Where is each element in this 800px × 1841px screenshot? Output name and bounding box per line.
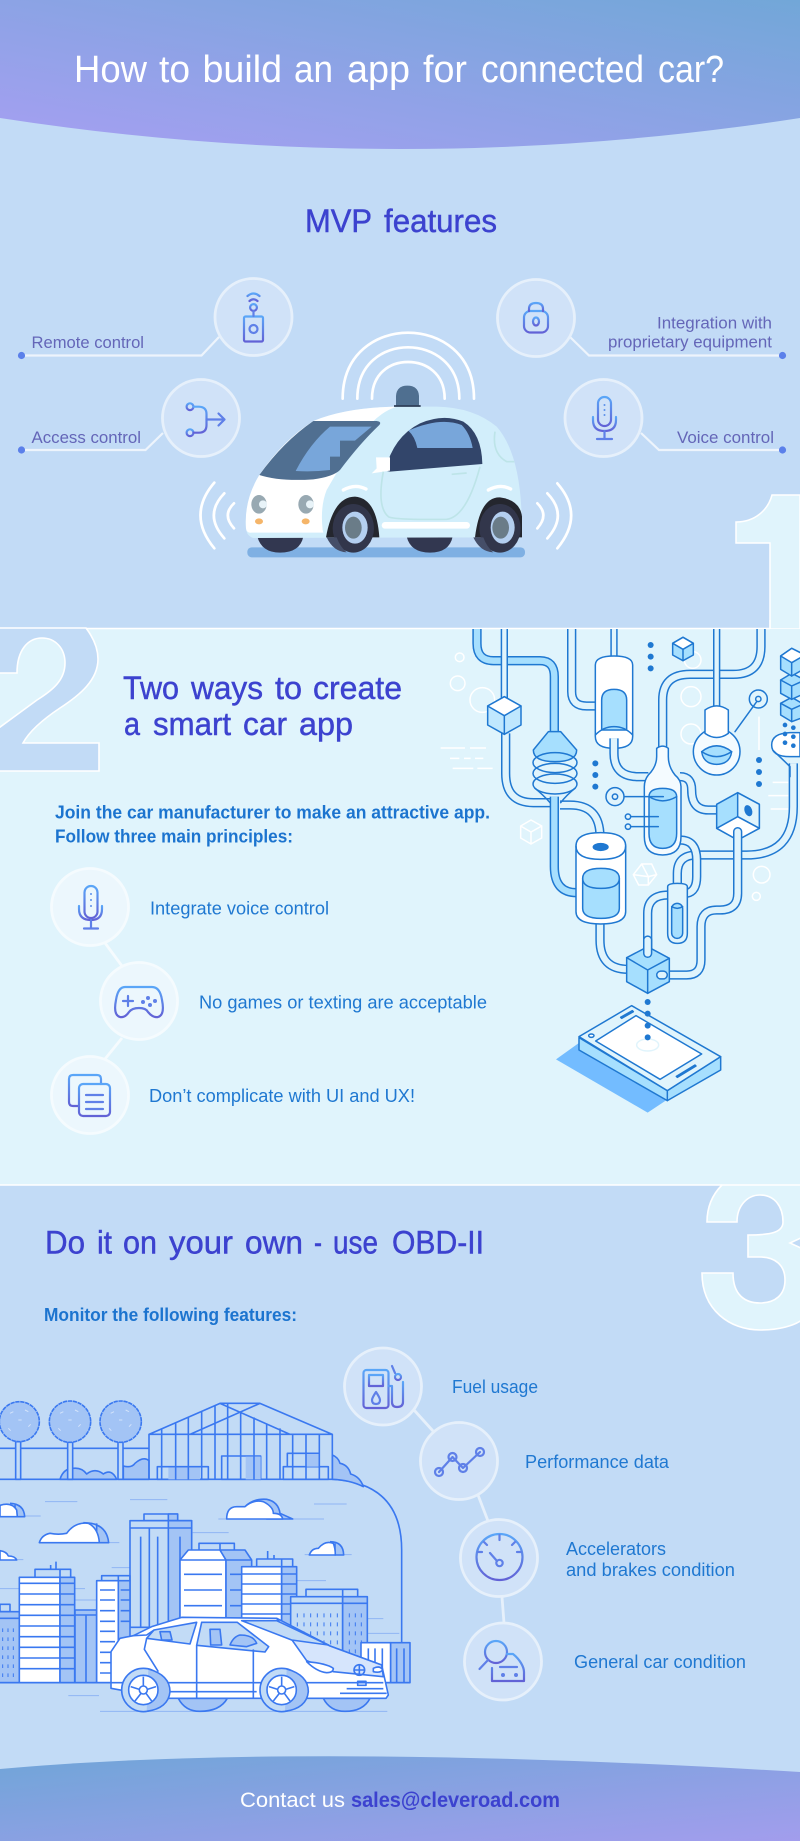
principle: simple UI <box>52 1056 415 1134</box>
heading: OBD-II: your <box>169 1224 233 1260</box>
container block <box>361 1643 410 1683</box>
wide right block <box>291 1589 367 1660</box>
heading: MVP features: MVP <box>305 203 372 239</box>
windshield <box>259 421 380 480</box>
phone <box>579 1006 721 1101</box>
footer contact <box>240 1789 560 1812</box>
title: build <box>202 49 282 91</box>
dots over phone <box>645 999 651 1040</box>
angled tower <box>180 1543 252 1630</box>
dots <box>592 642 796 790</box>
title: app <box>347 49 410 91</box>
funnel coils <box>533 732 577 803</box>
heading: MVP features: features <box>384 203 497 239</box>
section 2 panel <box>0 629 800 1185</box>
signal arcs <box>200 333 571 548</box>
heading: two ways: smart <box>153 706 231 742</box>
beacon <box>396 386 419 406</box>
panel edges <box>0 628 770 1185</box>
illustration: pipes and phone <box>441 627 800 1113</box>
feature: voice control <box>565 380 786 456</box>
tube: cube down <box>661 832 738 975</box>
wheels under car <box>257 537 303 553</box>
icon: lock <box>524 303 548 332</box>
footer contact: Contact us <box>240 1789 345 1812</box>
title: an <box>294 49 333 91</box>
tube: narrow syringe top <box>610 629 618 656</box>
test tube <box>668 883 687 943</box>
principle: no games <box>100 962 487 1040</box>
top small cube <box>673 637 693 661</box>
buildings <box>0 1514 410 1683</box>
principle: simple UI: Don’t complicate with UI and UX! <box>149 1086 415 1106</box>
illustration: self-driving car <box>200 333 571 557</box>
tube: bottle to right cube <box>680 777 723 810</box>
top-left cube <box>488 697 521 734</box>
phone shadow <box>556 1043 667 1113</box>
side window <box>385 418 482 472</box>
tube: syringe to bottle <box>614 738 648 777</box>
ground and dome line <box>0 1479 402 1643</box>
car body <box>246 407 522 538</box>
heading: two ways: car <box>243 706 287 742</box>
feature: accelerators and brakes: and brakes condition <box>566 1560 735 1580</box>
low block <box>75 1610 97 1683</box>
bottle flask <box>624 745 682 856</box>
principle: voice: Integrate voice control <box>150 898 329 918</box>
striped tower <box>19 1562 75 1683</box>
principles list <box>52 868 487 1134</box>
city car body <box>111 1617 388 1698</box>
stacked cubes <box>781 648 800 722</box>
title: How <box>74 49 148 91</box>
tube: top-left filled <box>477 627 554 732</box>
title: for <box>423 49 467 91</box>
round flask <box>693 706 740 775</box>
numeral 1 <box>736 495 800 629</box>
tube: left of syringe <box>572 627 597 706</box>
header band <box>0 0 800 149</box>
feature: voice control: Voice control <box>677 428 774 447</box>
heading: two ways <box>123 670 402 742</box>
icon: microphone <box>593 397 616 439</box>
footer band <box>0 1756 800 1841</box>
decorative circles and dashes <box>441 652 788 900</box>
greenhouse <box>149 1403 332 1479</box>
footer contact: sales@cleveroad.com <box>351 1789 560 1812</box>
gauges <box>606 690 767 829</box>
feature: access control <box>18 380 240 456</box>
principle: voice <box>52 868 329 946</box>
title: to <box>159 49 190 91</box>
hood <box>277 1618 383 1677</box>
feature: general car condition <box>464 1623 746 1700</box>
heading: MVP features <box>305 203 497 239</box>
heading: OBD-II: Do <box>45 1224 85 1260</box>
heading: OBD-II: it <box>97 1224 112 1260</box>
headlights <box>251 495 267 514</box>
monitored features list <box>344 1348 746 1700</box>
tube: narrow right vertical <box>713 629 720 706</box>
numeral 1 stem over panel <box>769 620 771 629</box>
feature: remote control: Remote control <box>32 333 144 352</box>
tube: cylinder to cube <box>600 922 628 969</box>
title: car? <box>658 49 724 91</box>
heading: OBD-II: own <box>245 1224 303 1260</box>
intro text <box>55 802 490 846</box>
heading: OBD-II <box>45 1224 484 1260</box>
mirror <box>372 457 390 473</box>
feature: integration with proprietary equipment <box>498 280 786 359</box>
tower back <box>130 1514 192 1627</box>
faint horizon lines <box>0 1500 399 1711</box>
hedge line <box>0 1446 149 1451</box>
feature: accelerators and brakes: Accelerators <box>566 1539 666 1559</box>
tube: funnel to cylinder <box>554 797 577 893</box>
tube: bottle up <box>663 627 761 748</box>
door lines <box>381 432 514 519</box>
right cube <box>717 793 759 840</box>
striped right tower <box>242 1551 297 1627</box>
sill <box>382 522 470 529</box>
feature: general car condition: General car condition <box>574 1652 746 1672</box>
rear wheels <box>178 1698 370 1711</box>
heading: two ways: create <box>313 670 402 706</box>
title: connected <box>481 49 644 91</box>
heading: two ways: to <box>275 670 302 706</box>
numeral 2 <box>0 628 99 771</box>
front wheel <box>326 497 379 537</box>
car wheels <box>122 1668 308 1712</box>
icon: branching arrow <box>187 403 224 436</box>
intro text: Follow three main principles: <box>55 826 293 846</box>
tube: to shower head <box>677 763 793 887</box>
clouds <box>0 1499 344 1560</box>
far-left block <box>0 1604 19 1683</box>
heading: two ways: ways <box>190 670 263 706</box>
syringe cylinder <box>595 656 633 748</box>
heading: OBD-II: use <box>333 1224 378 1260</box>
title <box>74 49 724 91</box>
icon: remote <box>244 294 263 342</box>
windows <box>147 1622 197 1644</box>
illustration: city and car <box>0 1401 410 1712</box>
principle: no games: No games or texting are acceptable <box>199 992 487 1012</box>
feature: integration with proprietary equipment: Integration with <box>657 314 772 332</box>
heading: two ways: app <box>299 706 353 742</box>
feature: remote control <box>18 278 292 359</box>
ground shadow <box>247 547 525 557</box>
heading: OBD-II: - <box>314 1224 322 1260</box>
heading: two ways: Two <box>123 670 179 706</box>
feature: accelerators and brakes <box>460 1520 735 1596</box>
feature: fuel usage: Fuel usage <box>452 1377 538 1397</box>
seats <box>160 1629 257 1647</box>
tube: cube up to test tube <box>648 895 668 955</box>
feature: performance data <box>420 1422 670 1500</box>
shower head <box>772 733 800 777</box>
heading: two ways: a <box>124 706 140 742</box>
monitor text: Monitor the following features: <box>44 1305 297 1325</box>
numeral 3 <box>702 1185 800 1330</box>
heading: OBD-II: on <box>123 1224 157 1260</box>
rear wheel <box>475 497 522 537</box>
feature: performance data: Performance data <box>525 1452 670 1472</box>
feature: access control: Access control <box>32 428 141 447</box>
tube: left empty <box>506 733 550 803</box>
heading: OBD-II: OBD-II <box>392 1224 484 1260</box>
big cylinder <box>576 833 626 924</box>
intro text: Join the car manufacturer to make an attractive app. <box>55 802 490 822</box>
feature: integration with proprietary equipment: proprietary equipment <box>608 332 772 352</box>
bushes <box>60 1468 117 1479</box>
narrow tower <box>97 1576 130 1683</box>
lower cube <box>627 947 669 993</box>
feature: fuel usage <box>344 1348 538 1425</box>
trees <box>0 1401 141 1479</box>
tube: bottle loop <box>680 840 697 893</box>
